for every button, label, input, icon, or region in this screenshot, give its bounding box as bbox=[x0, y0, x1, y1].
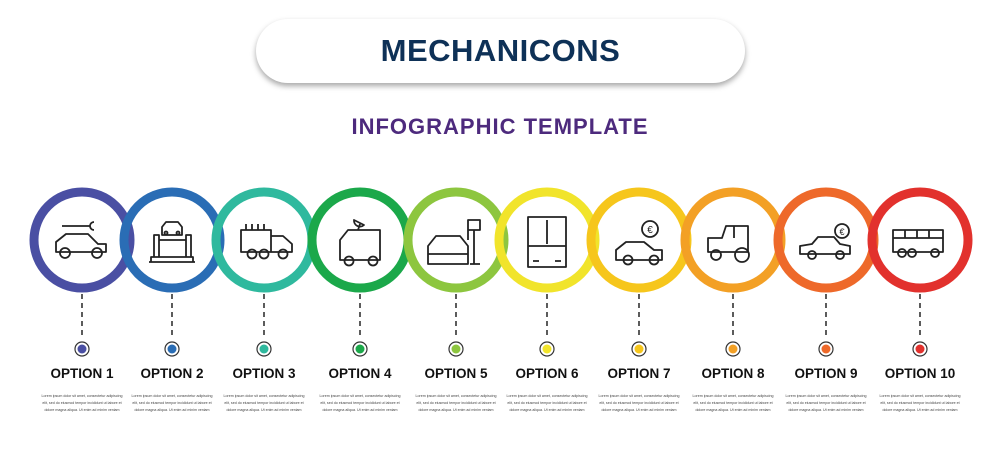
text 5: Lorem ipsum dolor sit amet, consectetur adipiscing bbox=[416, 394, 496, 398]
icon: car lift bbox=[149, 222, 195, 262]
icon: truck bbox=[241, 224, 292, 258]
text 6: dolore magna aliqua. Ut enim ad minim veniam bbox=[509, 408, 585, 412]
icon: sedan with euro bbox=[800, 224, 850, 259]
text 3: elit, sed do eiusmod tempor incididunt ut labore et bbox=[224, 401, 304, 405]
text 4: dolore magna aliqua. Ut enim ad minim veniam bbox=[322, 408, 398, 412]
text 1: dolore magna aliqua. Ut enim ad minim veniam bbox=[44, 408, 120, 412]
text 2: Lorem ipsum dolor sit amet, consectetur adipiscing bbox=[132, 394, 212, 398]
text 6: elit, sed do eiusmod tempor incididunt ut labore et bbox=[507, 401, 587, 405]
text 4: elit, sed do eiusmod tempor incididunt ut labore et bbox=[320, 401, 400, 405]
text 8: Lorem ipsum dolor sit amet, consectetur adipiscing bbox=[693, 394, 773, 398]
text 3: Lorem ipsum dolor sit amet, consectetur adipiscing bbox=[224, 394, 304, 398]
icon: bus side bbox=[893, 230, 943, 257]
circle 10 bbox=[872, 192, 968, 288]
icon: sedan with euro: € bbox=[839, 227, 845, 237]
circle 7 bbox=[591, 192, 687, 288]
text 1 bbox=[42, 394, 122, 412]
text 9: dolore magna aliqua. Ut enim ad minim veniam bbox=[788, 408, 864, 412]
text 2: dolore magna aliqua. Ut enim ad minim veniam bbox=[134, 408, 210, 412]
icon: car with euro bbox=[616, 221, 662, 264]
option 3: OPTION 3 bbox=[232, 366, 296, 381]
text 3 bbox=[224, 394, 304, 412]
text 2: elit, sed do eiusmod tempor incididunt ut labore et bbox=[132, 401, 212, 405]
title: MECHANICONS bbox=[381, 33, 620, 68]
option 1: OPTION 1 bbox=[50, 366, 114, 381]
circle 1 bbox=[34, 192, 130, 288]
circle 2 bbox=[124, 192, 220, 288]
text 4 bbox=[320, 394, 400, 412]
text 4: Lorem ipsum dolor sit amet, consectetur adipiscing bbox=[320, 394, 400, 398]
text 7 bbox=[598, 394, 680, 412]
icon: bus front bbox=[528, 217, 566, 267]
text 7: elit, sed do eiusmod tempor incididunt ut labore et bbox=[599, 401, 679, 405]
text 5 bbox=[416, 394, 496, 412]
option 7: OPTION 7 bbox=[607, 366, 670, 381]
option 10: OPTION 10 bbox=[885, 366, 955, 381]
option 5: OPTION 5 bbox=[424, 366, 488, 381]
icon: tractor bbox=[708, 226, 749, 262]
text 1: elit, sed do eiusmod tempor incididunt ut labore et bbox=[42, 401, 122, 405]
icon: car front with jack bbox=[428, 220, 480, 264]
text 3: dolore magna aliqua. Ut enim ad minim veniam bbox=[226, 408, 302, 412]
text 2 bbox=[132, 394, 212, 412]
circle 5 bbox=[408, 192, 504, 288]
option 6: OPTION 6 bbox=[515, 366, 578, 381]
circle 6 bbox=[499, 192, 595, 288]
text 10: dolore magna aliqua. Ut enim ad minim veniam bbox=[882, 408, 958, 412]
circle 9 bbox=[778, 192, 874, 288]
title bbox=[256, 19, 745, 83]
option 4: OPTION 4 bbox=[328, 366, 392, 381]
text 8: dolore magna aliqua. Ut enim ad minim veniam bbox=[695, 408, 771, 412]
subtitle: INFOGRAPHIC TEMPLATE bbox=[351, 114, 649, 139]
icon: van with satellite bbox=[340, 220, 380, 266]
text 6: Lorem ipsum dolor sit amet, consectetur adipiscing bbox=[507, 394, 587, 398]
text 9: elit, sed do eiusmod tempor incididunt ut labore et bbox=[786, 401, 866, 405]
text 1: Lorem ipsum dolor sit amet, consectetur adipiscing bbox=[42, 394, 122, 398]
icon: car with euro: € bbox=[647, 225, 653, 236]
text 10: elit, sed do eiusmod tempor incididunt ut labore et bbox=[880, 401, 960, 405]
icon: car with wrench bbox=[56, 222, 106, 258]
circle 8 bbox=[685, 192, 781, 288]
text 8: elit, sed do eiusmod tempor incididunt ut labore et bbox=[693, 401, 773, 405]
text 7: dolore magna aliqua. Ut enim ad minim veniam bbox=[601, 408, 677, 412]
text 9 bbox=[786, 394, 866, 412]
text 10: Lorem ipsum dolor sit amet, consectetur adipiscing bbox=[880, 394, 960, 398]
text 9: Lorem ipsum dolor sit amet, consectetur adipiscing bbox=[786, 394, 866, 398]
text 6 bbox=[506, 394, 588, 412]
circle 3 bbox=[216, 192, 312, 288]
option 8: OPTION 8 bbox=[701, 366, 764, 381]
text 7: Lorem ipsum dolor sit amet, consectetur adipiscing bbox=[599, 394, 679, 398]
option 2: OPTION 2 bbox=[140, 366, 204, 381]
text 8 bbox=[692, 394, 774, 412]
option 9: OPTION 9 bbox=[794, 366, 858, 381]
text 10 bbox=[880, 394, 960, 412]
circle 4 bbox=[312, 192, 408, 288]
text 5: elit, sed do eiusmod tempor incididunt ut labore et bbox=[416, 401, 496, 405]
text 5: dolore magna aliqua. Ut enim ad minim veniam bbox=[418, 408, 494, 412]
